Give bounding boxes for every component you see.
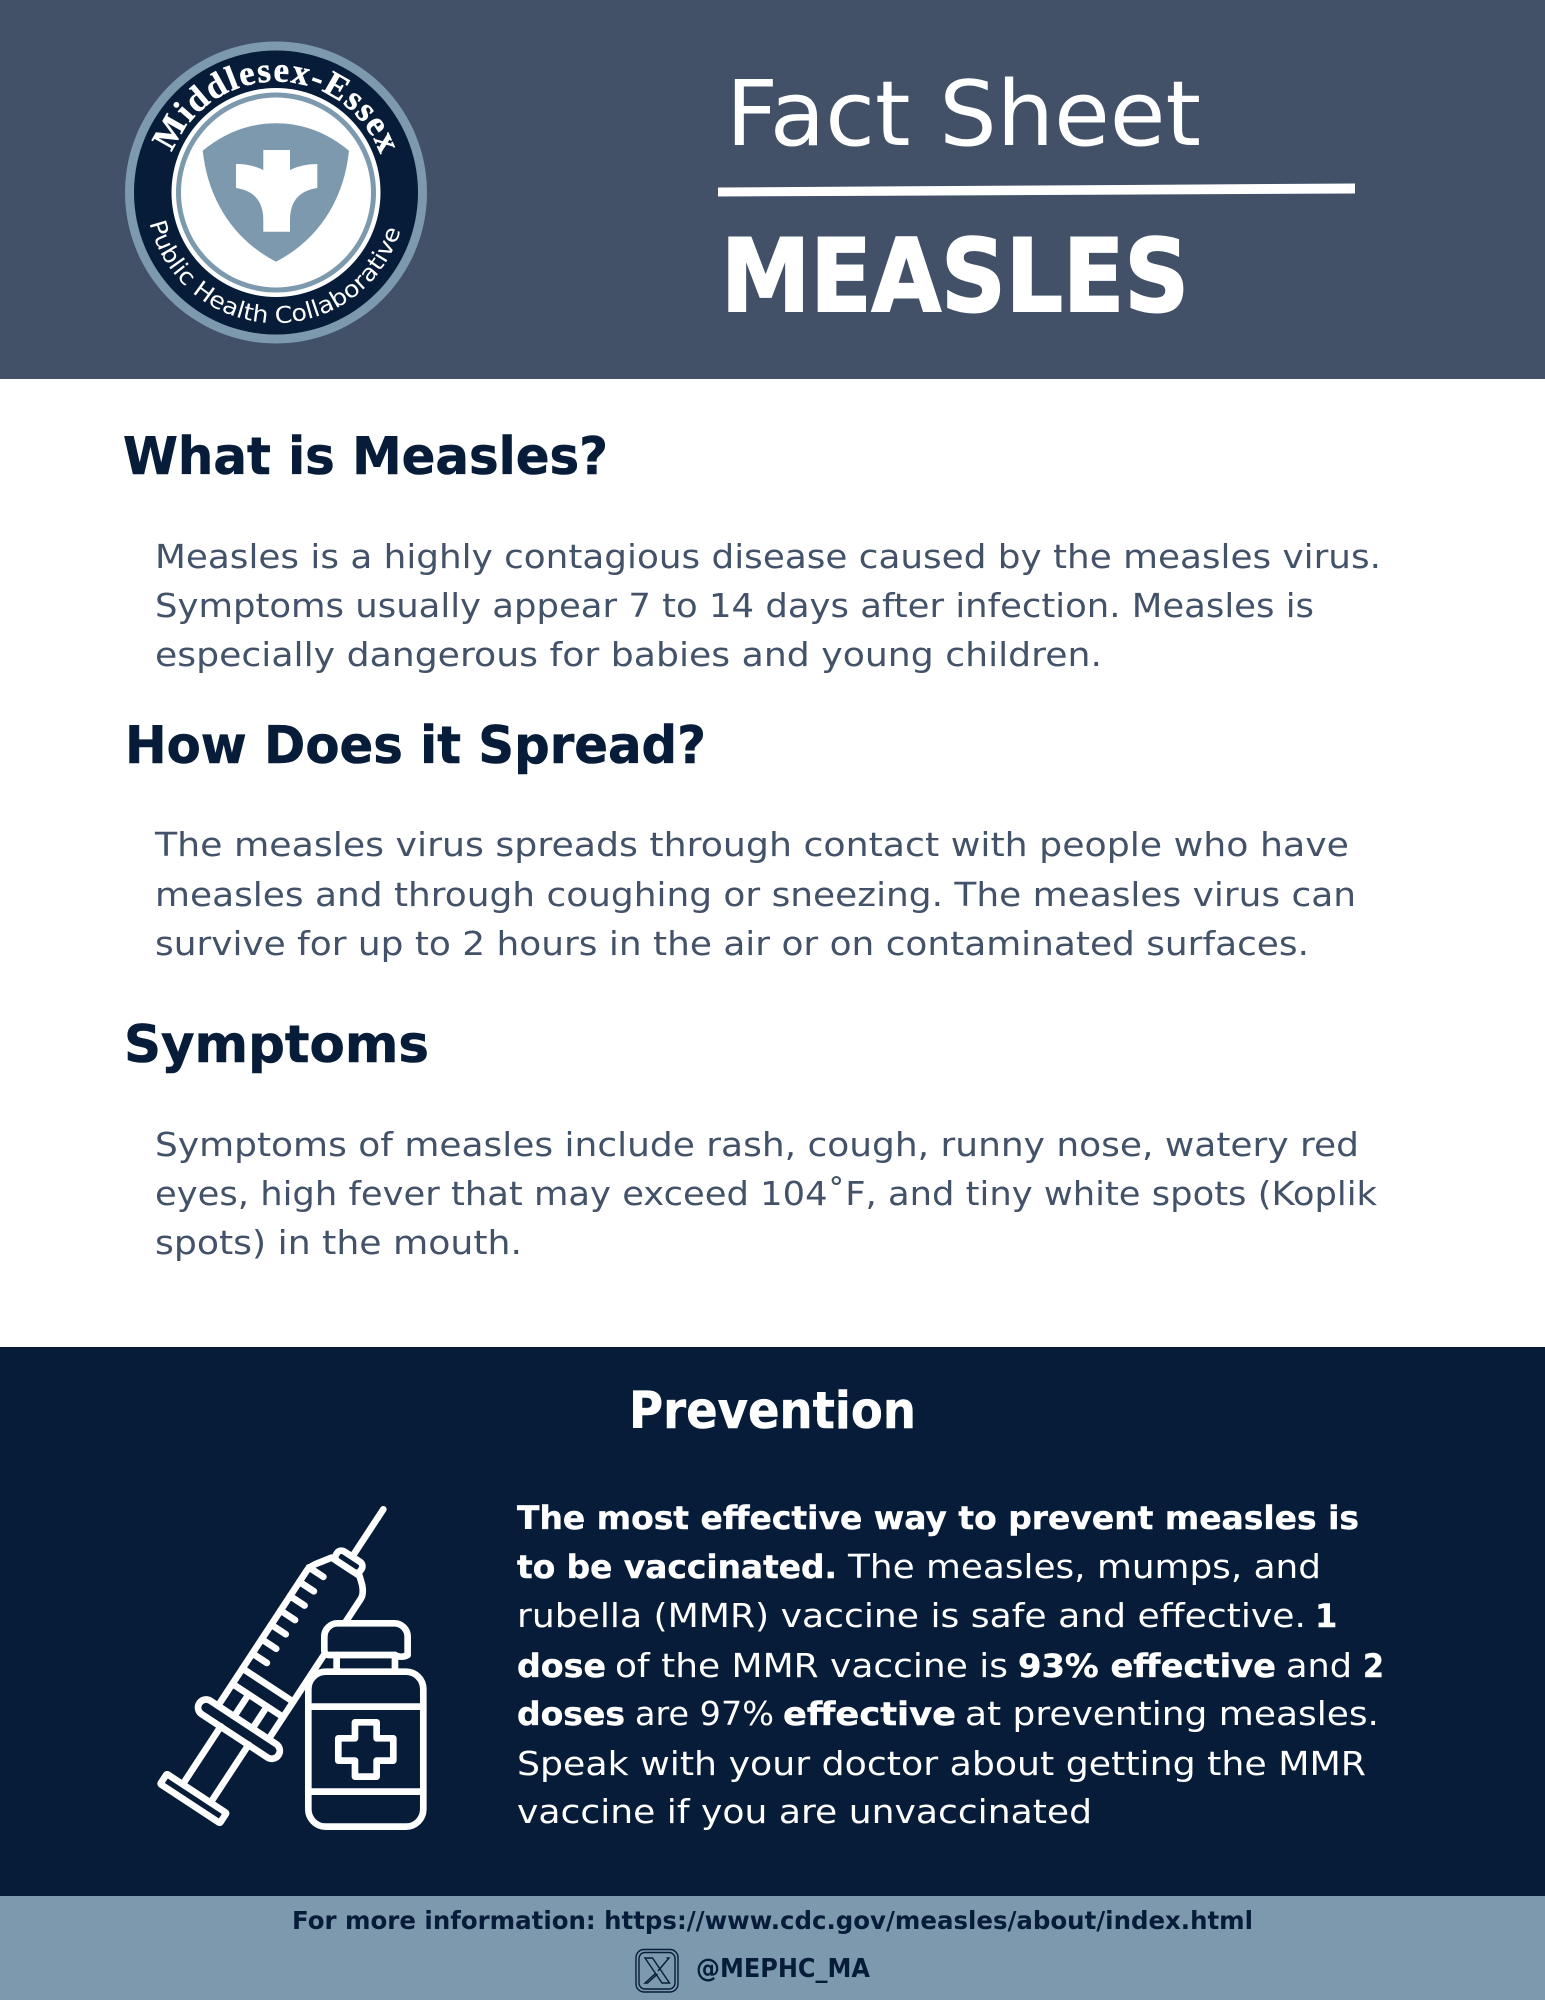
panel: how does it spread xyxy=(125,716,1356,963)
text block: vaccination advice: dose xyxy=(517,1647,606,1685)
heading: What is Measles?: What is Measles? xyxy=(123,427,608,487)
panel: symptoms xyxy=(124,1015,1377,1262)
text block: transmission: measles and through coughing or sneezing. The measles virus can xyxy=(155,876,1356,914)
text block: symptom list xyxy=(155,1126,1377,1262)
text block: transmission: survive for up to 2 hours in the air or on contaminated surfaces. xyxy=(155,925,1309,963)
text block: definition: Measles is a highly contagious disease caused by the measles virus. xyxy=(155,538,1381,576)
text block: vaccination advice: 93% effective xyxy=(1018,1647,1276,1685)
icon: X social logo xyxy=(636,1950,678,1992)
text block: vaccination advice xyxy=(517,1499,1384,1831)
text block: definition: Symptoms usually appear 7 to 14 days after infection. Measles is xyxy=(155,587,1314,625)
logo: Middlesex-Essex Public Health Collaborative seal: Middlesex-Essex xyxy=(151,64,396,155)
text block: definition: especially dangerous for babies and young children. xyxy=(155,636,1102,674)
text block: transmission xyxy=(154,826,1356,963)
text block: vaccination advice: 1 xyxy=(1315,1597,1337,1635)
text block: vaccination advice: Speak with your doctor about getting the MMR xyxy=(517,1745,1366,1783)
text block: vaccination advice: The measles, mumps, and xyxy=(847,1548,1321,1586)
panel: what is measles xyxy=(123,427,1381,674)
text block: transmission: The measles virus spreads through contact with people who have xyxy=(154,826,1349,864)
heading: How Does it Spread?: How Does it Spread? xyxy=(125,716,706,776)
text block: vaccination advice: are 97% xyxy=(635,1695,774,1733)
text block: vaccination advice: doses xyxy=(517,1695,625,1733)
text block: vaccination advice: The most effective way to prevent measles is xyxy=(517,1499,1359,1537)
title: MEASLES: MEASLES xyxy=(721,217,1189,335)
text block: vaccination advice: of the MMR vaccine is xyxy=(615,1647,1008,1685)
text block: definition xyxy=(155,538,1381,674)
logo: Middlesex-Essex Public Health Collaborative seal: Public Health Collaborative xyxy=(150,220,400,324)
text block: vaccination advice: and xyxy=(1286,1647,1352,1685)
footer band xyxy=(0,1896,1545,2000)
title divider xyxy=(718,184,1355,196)
text block: vaccination advice: rubella (MMR) vaccine is safe and effective. xyxy=(517,1597,1306,1635)
text block: vaccination advice: at preventing measles. xyxy=(965,1695,1379,1733)
panel: prevention xyxy=(0,1347,1545,1896)
heading: Symptoms: Symptoms xyxy=(124,1015,429,1075)
logo: Middlesex-Essex Public Health Collaborative seal xyxy=(125,42,427,344)
title: Fact Sheet: Fact Sheet xyxy=(726,62,1201,167)
text block: symptom list: Symptoms of measles include rash, cough, runny nose, watery red xyxy=(155,1126,1359,1164)
heading: Prevention: Prevention xyxy=(629,1382,916,1441)
social handle: @MEPHC_MA xyxy=(696,1954,870,1984)
header band xyxy=(0,0,1545,379)
text block: vaccination advice: to be vaccinated. xyxy=(517,1548,837,1586)
icon: syringe and vaccine vial xyxy=(151,1483,423,1829)
text block: vaccination advice: vaccine if you are unvaccinated xyxy=(517,1793,1092,1831)
text block: vaccination advice: effective xyxy=(783,1695,956,1733)
footer link: more information: For more information: https://www.cdc.gov/measles/about/index.html xyxy=(292,1906,1253,1935)
text block: symptom list: eyes, high fever that may exceed 104˚F, and tiny white spots (Koplik xyxy=(155,1175,1377,1213)
text block: symptom list: spots) in the mouth. xyxy=(155,1224,522,1262)
text block: vaccination advice: 2 xyxy=(1363,1647,1384,1685)
